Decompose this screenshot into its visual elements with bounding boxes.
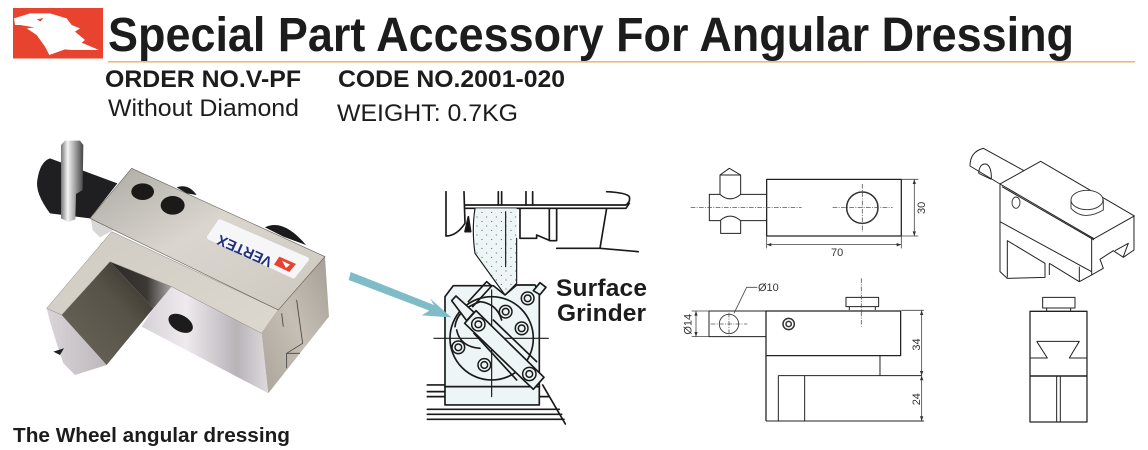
top view drawing: [691, 168, 928, 259]
dimension 70: 70: [831, 247, 843, 259]
dimension diameter 10: Ø10: [758, 282, 779, 294]
dimension 34: 34: [911, 338, 923, 351]
surface grinder label: Grinder: [557, 300, 646, 327]
rotary table: [434, 282, 548, 397]
arrow: [349, 272, 451, 317]
dimension diameter 14: Ø14: [683, 314, 695, 335]
code number: CODE NO.2001-020: [338, 66, 565, 93]
surface grinder diagram: [349, 192, 638, 424]
angular bar: [452, 283, 546, 389]
dimension 30: 30: [916, 202, 928, 214]
icon: eagle logo: [13, 8, 103, 58]
side view drawing: [683, 278, 924, 421]
grinder head: [446, 192, 638, 252]
grinder rails: [427, 385, 565, 424]
weight: WEIGHT: 0.7KG: [337, 100, 518, 127]
dimension 24: 24: [911, 393, 923, 405]
fixture block: [445, 285, 539, 405]
mounting bolts: [452, 292, 536, 381]
isometric view drawing: [970, 148, 1134, 282]
surface grinder label: Surface: [556, 275, 647, 302]
order number: ORDER NO.V-PF: [105, 66, 301, 93]
product photo: VERTEX: [215, 231, 275, 269]
front view drawing: [1030, 297, 1087, 422]
caption: The Wheel angular dressing: [13, 425, 290, 447]
product photo: [37, 141, 329, 393]
grinding wheel: [473, 208, 517, 295]
title: Special Part Accessory For Angular Dressing: [108, 9, 1074, 62]
diamond note: Without Diamond: [108, 95, 299, 122]
